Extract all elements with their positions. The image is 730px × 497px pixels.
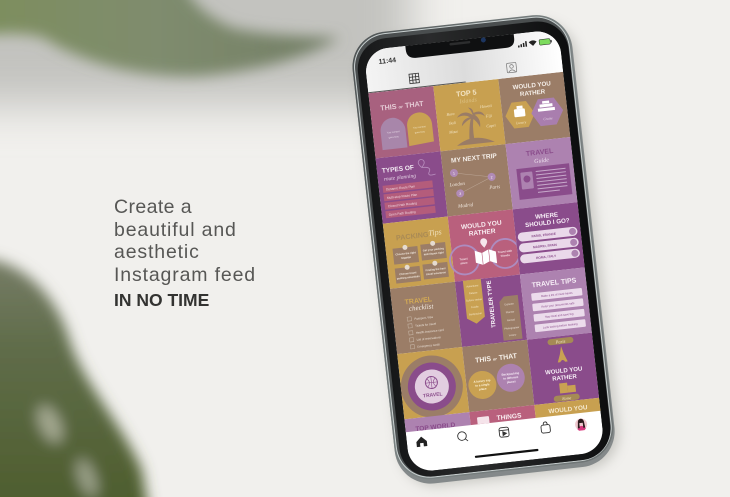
phone highlight rim: [351, 13, 615, 481]
tile: travel guide: TRAVEL: [526, 148, 554, 158]
tile: travel tips: Make a list of must-haves: [541, 291, 573, 298]
tile: top 5: Maui: [448, 129, 458, 135]
tile: would you rather paris: Rome: [561, 395, 572, 401]
tile: this or that: [368, 86, 441, 159]
tile: packing tips: Tips: [428, 227, 442, 238]
bottom navigation: [416, 418, 588, 458]
tile: types of route planning: Multi-stop Route Plan: [387, 193, 418, 200]
tile: packing tips: Finding the best: [425, 266, 446, 272]
tile: traveler type: Backpacker: [469, 312, 482, 316]
tile: things: [469, 405, 536, 426]
tile: traveler type: TRAVELER TYPE: [486, 280, 498, 328]
phone frame: [349, 11, 617, 483]
tile: top 5: Bali: [449, 120, 456, 126]
tile: my next trip: 1: [453, 171, 455, 176]
tile: travel checklist: Tickets for travel: [415, 322, 437, 328]
post grid: [368, 72, 600, 432]
tile: this or that circles: THIS or THAT: [475, 353, 518, 365]
tile: types of route planning: [375, 151, 448, 224]
icon: battery: [539, 38, 552, 45]
tile: packing tips: Choose the right: [395, 250, 416, 256]
tile: would you rather map: WOULD YOU: [461, 220, 502, 231]
tile: would you rather map: alone: [460, 261, 468, 265]
tile: this or that circles: Backpacking: [501, 371, 520, 377]
tile: where should i go: WHERE: [535, 211, 558, 221]
phone shadow: [355, 18, 623, 490]
tile: travel tips: Keep your documents safe: [541, 301, 575, 309]
tile: traveler type: [455, 275, 527, 347]
tile: travel badge: [397, 347, 469, 421]
tile: this or that: goes here: [415, 130, 426, 134]
tile: would you rather paris: [527, 333, 599, 405]
camera: [481, 37, 486, 43]
tile: would you rather map: RATHER: [468, 228, 496, 238]
tile: would you rather hexagons: WOULD YOU: [512, 80, 552, 91]
tile: traveler type: Planner: [506, 310, 515, 314]
icon: tagged tab: [506, 62, 517, 73]
tile: this or that circles: A luxury trip: [473, 378, 491, 384]
tile: travel guide: Guide: [534, 157, 550, 165]
tile: this or that circles: to different: [503, 375, 519, 381]
tile: things: THINGS: [496, 412, 522, 422]
tile: traveler type: Explorer: [504, 302, 514, 306]
tile: top 5: [433, 79, 506, 151]
tile: this or that: goes here: [389, 135, 400, 139]
phone mockup: [352, 15, 624, 491]
tile: where should i go: SHOULD I GO?: [525, 217, 570, 229]
icon: grid tab: [409, 73, 419, 84]
tile: types of route planning: route planning: [384, 173, 417, 183]
tile: would you rather map: Travel with: [497, 249, 513, 254]
profile tab header: [364, 29, 563, 93]
phone bezel: [355, 18, 614, 480]
tile: traveler type: Adventurer: [466, 284, 479, 288]
phone body edge: [349, 12, 618, 487]
icon: search: [457, 431, 468, 442]
tile: travel checklist: Health insurance card: [416, 328, 444, 335]
tile: top world: [404, 412, 471, 432]
tile: traveler type: Foodie: [471, 305, 479, 309]
tile: packing tips: [383, 217, 455, 289]
tile: top 5: Capri: [486, 123, 496, 129]
tile: packing tips: packing essentials: [397, 274, 420, 280]
tile: where should i go: ROMA, ITALY: [536, 254, 557, 260]
tile: types of route planning: TYPES OF: [382, 164, 414, 175]
tile: traveler type: Photographer: [504, 326, 520, 331]
tile: my next trip: Paris: [488, 185, 501, 191]
tile: types of route planning: Closed Path Routing: [388, 201, 417, 208]
tile: would you: WOULD YOU: [548, 404, 588, 415]
active tab underline: [368, 82, 466, 93]
tile: travel tips: Stay local and save big: [545, 312, 574, 319]
tile: would you rather hexagons: RATHER: [520, 88, 546, 98]
tile: packing tips: luggage: [401, 255, 412, 260]
tile: traveler type: Luxury: [509, 333, 517, 337]
tile: packing tips: PACKING: [396, 230, 429, 242]
tile: types of route planning: Open Path Routing: [389, 210, 416, 217]
tile: travel checklist: List of reservations: [416, 335, 442, 342]
tile: travel badge: TRAVEL: [423, 391, 443, 400]
tile: this or that circles: places: [507, 379, 516, 384]
tile: packing tips: Choose travel: [399, 270, 417, 276]
tile: top world: TOP WORLD: [415, 422, 456, 433]
tile: would you rather paris: WOULD YOU: [545, 366, 583, 376]
tile: would you rather hexagons: Cruise: [543, 116, 553, 121]
status time: 11:44: [378, 57, 397, 66]
headline emphasis: in no time: IN NO TIME: [114, 290, 209, 310]
tile: travel checklist: checklist: [409, 302, 435, 313]
icon: home: [416, 436, 427, 447]
home indicator: [475, 449, 539, 458]
tile: travel checklist: Passport, Visa: [414, 315, 433, 321]
tile: where should i go: MADRID, SPAIN: [533, 243, 558, 249]
tile: packing tips: techniques right: [423, 250, 444, 256]
tile: my next trip: London: [448, 182, 466, 189]
tile: packing tips: travel insurance: [426, 270, 447, 276]
tile: top 5: Fiji: [485, 113, 492, 119]
icon: shop bag: [540, 421, 551, 433]
tile: would you rather map: friends: [500, 253, 511, 258]
tile: travel checklist: TRAVEL: [404, 296, 433, 306]
tile: would you rather hexagons: [498, 72, 571, 144]
tile: travel guide: [506, 137, 578, 209]
headline line: instagram feed: Instagram feed: [114, 264, 256, 286]
tile: traveler type: Relaxer: [469, 291, 478, 295]
tile: top 5: Hawaii: [479, 103, 492, 109]
tile: my next trip: 2: [490, 175, 493, 179]
icon: signal bars: [518, 41, 527, 48]
tile: would you: [534, 398, 600, 418]
icon: reels: [499, 427, 509, 437]
tile: top 5: Islands: [458, 97, 478, 105]
headline line: beautiful and: beautiful and: [114, 219, 237, 241]
icon: wifi: [528, 40, 536, 46]
tile: travel checklist: [390, 282, 462, 354]
tile: where should i go: PARIS, FRANCE: [531, 232, 556, 238]
tile: my next trip: [441, 144, 513, 217]
tile: packing tips: Get your packing: [423, 246, 444, 252]
speaker: [449, 41, 470, 46]
tile: my next trip: Madrid: [457, 203, 474, 210]
tile: would you rather map: [445, 209, 522, 282]
tile: would you rather map: Travel: [459, 257, 468, 261]
tile: this or that: Your content: [413, 125, 426, 130]
tile: types of route planning: Dynamic Route Plan: [386, 184, 415, 192]
tile: my next trip: 3: [459, 192, 462, 196]
tile: this or that: THIS or THAT: [380, 99, 425, 113]
tile: would you rather hexagons: Luxury: [515, 120, 527, 125]
icon: profile avatar: [575, 418, 588, 431]
tile: travel checklist: Emergency cards: [417, 342, 441, 349]
tile: traveler type: Culture seeker: [466, 298, 482, 303]
tile: this or that: Your content: [387, 130, 400, 134]
tile: top 5: TOP 5: [456, 87, 477, 99]
front camera and speaker: [449, 37, 486, 46]
headline line: create a: Create a: [114, 196, 192, 218]
tile: travel tips: TRAVEL TIPS: [531, 277, 577, 289]
tile: traveler type: Nomad: [507, 318, 516, 322]
headline text block: [114, 196, 256, 310]
tile: this or that circles: place: [479, 386, 487, 391]
tile: top 5: Bora: [446, 111, 455, 117]
tile: my next trip: MY NEXT TRIP: [451, 153, 498, 165]
headline line: aesthetic: aesthetic: [114, 241, 200, 263]
tile: would you rather paris: RATHER: [552, 374, 578, 383]
notch: [405, 33, 515, 59]
tile: travel tips: Look locking before booking: [543, 322, 578, 330]
phone inner rim: [352, 14, 614, 480]
tile: this or that circles: [462, 340, 534, 412]
tile: where should i go: [513, 202, 585, 275]
tile: would you rather paris: Paris: [554, 339, 566, 345]
tile: travel tips: [520, 267, 592, 340]
screen: [363, 28, 607, 485]
tile: this or that circles: to a single: [475, 382, 490, 388]
